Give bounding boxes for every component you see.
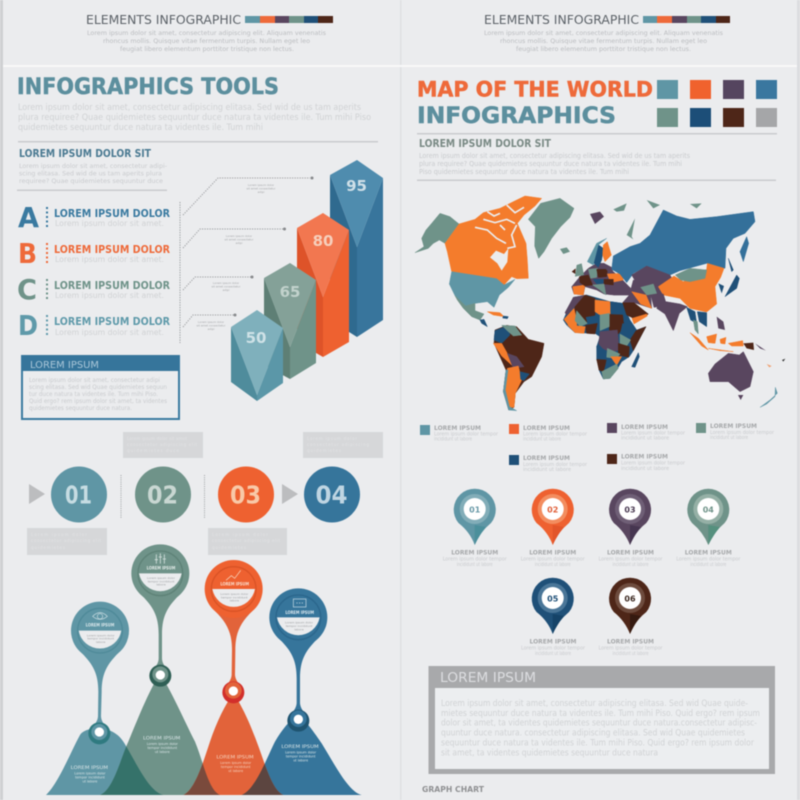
leader captions: Lorem ipsum dolor <box>198 320 225 324</box>
text: quidemietes <box>307 448 341 453</box>
legend item teal: LOREM IPSUM <box>434 424 481 432</box>
legend item navy: Lorem ipsum dolor tempor <box>523 462 588 468</box>
title: map of the world infographics: MAP OF THE WORLD <box>417 78 653 102</box>
bar 50 <box>231 310 283 401</box>
legend item navy: incididunt ut labore <box>523 467 571 473</box>
pin 06: 06 <box>624 594 636 604</box>
bar 95 <box>330 160 383 337</box>
bar 80 <box>297 213 349 357</box>
balloon: teal eye: LOREM IPSUM <box>86 622 114 628</box>
mountain labels: tempor incididunt <box>221 765 251 769</box>
legend item green: LOREM IPSUM <box>710 422 757 430</box>
item B: LOREM IPSUM DOLOR <box>54 244 170 256</box>
legend item purple: LOREM IPSUM <box>621 423 668 431</box>
pin 04: LOREM IPSUM <box>685 548 732 556</box>
mountain: orange <box>183 693 283 795</box>
overlap: green and orange <box>184 764 220 796</box>
header: right elements infographic: feugiat libero elementum porttitor tristique non lectus. <box>516 45 691 53</box>
text: Lorem ipsum dolor sit amet <box>127 436 187 441</box>
text: Lorem ipsum dolor <box>307 436 357 441</box>
balloon: teal eye: Lorem ipsum dolor <box>87 633 115 637</box>
legend item teal: Lorem ipsum dolor tempor <box>434 432 499 438</box>
step 03: 03 <box>230 480 261 510</box>
text: quidemietes <box>31 545 65 550</box>
grey text panel: quuntur duce natura. consectetur adipiscing elitasa. Sed wid Quae quidemietes <box>441 728 745 738</box>
bar 95: 95 <box>346 177 367 195</box>
overlap: orange and blue <box>242 764 283 796</box>
leader captions: sit amet consectetur <box>197 324 226 328</box>
pin 05: Lorem ipsum dolor tempor <box>521 646 586 652</box>
header: right elements infographic <box>484 13 730 53</box>
pin 02: LOREM IPSUM <box>529 548 576 556</box>
leader captions <box>197 183 276 331</box>
step 04: 04 <box>316 480 348 510</box>
item C: C <box>17 273 37 306</box>
text: consectetur adipiscing <box>307 442 369 447</box>
header: left elements infographic: feugiat libero elementum porttitor tristique non lectus. <box>120 45 294 53</box>
pin 06: LOREM IPSUM <box>607 638 654 646</box>
legend item orange <box>509 424 588 442</box>
step 01: 01 <box>65 480 92 510</box>
item A <box>18 201 170 234</box>
balloon: blue chat: tempor incididunt <box>286 624 313 628</box>
header: right elements infographic: ELEMENTS INFOGRAPHIC <box>484 13 639 27</box>
header: left elements infographic: rhoncus mollis. Quisque vitae fermentum turpis. Nullam eget leo <box>103 37 310 45</box>
step 04 <box>304 466 360 522</box>
item A: A <box>18 201 39 234</box>
balloon: blue chat: labore <box>294 627 304 631</box>
pin 03: Lorem ipsum dolor tempor <box>598 556 663 562</box>
legend item purple <box>607 423 686 442</box>
pin 01: LOREM IPSUM <box>451 548 498 556</box>
legend item brown <box>607 452 686 472</box>
africa <box>563 295 646 379</box>
asia <box>612 210 755 334</box>
subheading: map text: LOREM IPSUM DOLOR SIT <box>419 138 552 150</box>
text: consectetur adipiscing elit <box>31 538 101 543</box>
legend item orange: incididunt ut labore <box>523 436 561 442</box>
pin 01: Lorem ipsum dolor tempor <box>443 556 508 562</box>
mountain labels: ut labore <box>293 758 308 762</box>
grey text panel: sit amet, ta videntes quidemietes sequuntur duce natura <box>441 748 658 758</box>
leader captions: Lorem ipsum dolor <box>213 281 240 285</box>
arrow 1 <box>29 484 45 504</box>
mountain labels: Lorem ipsum dolor <box>74 771 106 775</box>
pin 01 <box>443 489 508 568</box>
legend item teal <box>420 424 499 442</box>
text: Lorem ipsum dolor <box>212 532 268 537</box>
header: left elements infographic: ELEMENTS INFOGRAPHIC <box>86 13 241 27</box>
overlap: teal and green <box>100 746 162 796</box>
intro text block: Lorem ipsum dolor sit amet, consectetur adipiscing elitasa. Sed wid de us tam aperits <box>18 103 361 113</box>
title: map of the world infographics: INFOGRAPHICS <box>417 103 616 129</box>
pin 02 <box>521 489 586 568</box>
bar 65 <box>264 263 316 379</box>
step 03 <box>218 466 274 522</box>
subheading: map text: Piso quidemietes sequuntur duce natura ta videntes ile. Tum mihi <box>419 168 629 176</box>
balloon: orange chart: tempor incididunt <box>221 595 248 599</box>
subheading block: scing elitasa. Sed wid de us tam aperits plura <box>19 170 162 178</box>
balloon: orange chart: Lorem ipsum dolor <box>220 592 249 596</box>
item B: B <box>18 237 37 270</box>
mountain labels: Lorem ipsum dolor <box>285 750 317 754</box>
grey caption boxes <box>27 432 383 555</box>
mountain labels: Lorem ipsum dolor <box>220 761 252 765</box>
leader lines <box>180 176 314 343</box>
item D: D <box>18 309 38 342</box>
callout box: lorem ipsum: tur duce natura ta videntes ile. Tum mihi Piso. <box>29 390 158 398</box>
mountain: green <box>100 673 220 795</box>
text: consectetur adipiscing elit <box>127 442 197 447</box>
legend item brown: Lorem ipsum dolor tempor <box>621 460 686 466</box>
item D: Lorem ipsum dolor sit amet. <box>55 328 164 337</box>
mountain labels: LOREM IPSUM <box>281 744 319 750</box>
mountain labels: ut labore <box>155 750 170 754</box>
islands north <box>560 200 702 254</box>
pin 05: incididunt ut labore <box>535 651 571 657</box>
leader captions: adipi <box>258 190 265 194</box>
legend item orange: LOREM IPSUM <box>523 424 570 432</box>
mountain: teal <box>46 728 163 795</box>
subheading block: requiree? Quae quidemietes sequuntur duce <box>19 177 163 185</box>
legend item brown: LOREM IPSUM <box>621 452 668 460</box>
item A: Lorem ipsum dolor sit amet. <box>55 219 164 228</box>
pin 06: incididunt ut labore <box>612 651 648 657</box>
balloon: orange chart: LOREM IPSUM <box>220 582 249 588</box>
pin 05: 05 <box>547 594 559 604</box>
header: left elements infographic: Lorem ipsum dolor sit amet, consectetur adipiscing elit. Aliquam venenatis <box>87 29 327 37</box>
balloon: orange chart <box>205 560 263 703</box>
item D: LOREM IPSUM DOLOR <box>54 316 170 328</box>
title: map of the world infographics <box>417 78 653 129</box>
item C: LOREM IPSUM DOLOR <box>54 280 170 292</box>
item B: Lorem ipsum dolor sit amet. <box>55 255 164 264</box>
pin 06: Lorem ipsum dolor tempor <box>598 646 663 652</box>
bar 50: 50 <box>246 329 266 347</box>
item C <box>17 273 170 306</box>
intro text block <box>18 103 371 133</box>
pin 03: 03 <box>624 506 636 514</box>
pin 05 <box>521 578 586 657</box>
pin 06 <box>598 578 663 657</box>
item B <box>18 237 170 270</box>
subheading block: Lorem ipsum dolor sit amet, consectetur adipi- <box>19 162 168 170</box>
mountain labels: Lorem ipsum dolor <box>147 742 179 746</box>
legend item purple: incididunt ut labore <box>621 436 669 442</box>
subheading: map text <box>419 138 690 176</box>
grey text panel: sequuntur duce natura ta videntes ile. Tum mihi Piso. Quid ergo? rem ipsum dolor <box>441 738 754 748</box>
legend item green: incididunt ut labore <box>710 435 748 441</box>
pin 04: incididunt ut labore <box>690 562 726 568</box>
pin 01: 01 <box>469 506 481 514</box>
mountain labels: LOREM IPSUM <box>216 755 254 761</box>
step 02: 02 <box>147 480 178 510</box>
subheading block: LOREM IPSUM DOLOR SIT <box>19 148 152 160</box>
list: A B C D <box>17 201 170 342</box>
balloon: blue chat: LOREM IPSUM <box>285 610 314 616</box>
legend item teal: incididunt ut labore <box>434 436 472 442</box>
balloon: teal eye <box>71 602 129 744</box>
legend item green: Lorem ipsum dolor tempor <box>710 430 775 436</box>
balloon: green sliders: labore <box>156 583 166 587</box>
subheading: map text: plura requiree? Quae quidemietes sequuntur duce natura ta videntes ile. Tum mihi <box>419 160 682 168</box>
callout box: lorem ipsum: quidemietes sequuntur duce natura. <box>29 404 132 412</box>
mountain: blue <box>242 713 362 795</box>
pin 03: LOREM IPSUM <box>607 548 654 556</box>
mountain labels: tempor incididunt <box>148 746 178 750</box>
balloon: blue chat: Lorem ipsum dolor <box>285 621 314 625</box>
indonesia and oceania <box>690 333 785 407</box>
south america <box>493 325 544 411</box>
leader captions: sit amet consectetur <box>225 238 254 242</box>
mountain labels: LOREM IPSUM <box>143 736 180 742</box>
balloon: teal eye: labore <box>96 640 106 644</box>
callout box: lorem ipsum: LOREM IPSUM <box>30 360 99 371</box>
balloon: green sliders: Lorem ipsum dolor <box>147 576 176 580</box>
balloon: green sliders: tempor incididunt <box>148 579 175 583</box>
pin 05: LOREM IPSUM <box>530 638 576 646</box>
step 02 <box>135 466 191 522</box>
icon: sliders <box>155 553 166 564</box>
balloon: green sliders: LOREM IPSUM <box>147 565 175 571</box>
north america <box>415 196 542 327</box>
world map <box>415 196 785 411</box>
icon: eye <box>93 613 107 619</box>
pin 04 <box>676 489 741 568</box>
pin 02: 02 <box>547 506 558 514</box>
mountain labels: tempor incididunt <box>286 754 316 758</box>
balloon mountains chart <box>46 544 362 795</box>
heading: graph chart: GRAPH CHART <box>422 785 485 794</box>
legend item purple: Lorem ipsum dolor tempor <box>621 430 686 436</box>
text: Lorem ipsum dolor <box>31 532 87 537</box>
item C: Lorem ipsum dolor sit amet. <box>55 291 164 300</box>
header: left elements infographic <box>86 13 333 53</box>
subheading: map text: Lorem ipsum dolor sit amet, consectetur adipiscing elitasa. Sed wid de us tam aperits <box>419 152 690 160</box>
mountain labels: ut labore <box>83 779 97 783</box>
balloon: green sliders <box>131 544 189 687</box>
callout box: lorem ipsum: Lorem ipsum dolor sit amet, consectetur adipi <box>29 376 160 384</box>
leader captions: sit amet consectetur <box>212 284 241 288</box>
mountain labels: LOREM IPSUM <box>71 765 108 771</box>
item D <box>18 309 170 342</box>
legend item green <box>696 422 775 441</box>
mountain labels: ut labore <box>228 769 243 773</box>
mountain labels: tempor incididunt <box>75 775 106 779</box>
balloon: teal eye: tempor incididunt <box>87 637 115 641</box>
text: quidemietes duce <box>127 448 180 453</box>
step 01 <box>51 466 107 522</box>
header: right elements infographic: Lorem ipsum dolor sit amet, consectetur adipiscing elit. Aliquam venenatis <box>484 29 724 37</box>
icon land: greenland <box>528 198 574 258</box>
mountain labels <box>71 736 319 783</box>
grey text panel: Lorem ipsum dolor sit amet, consectetur adipiscing elitasa. Sed wid Quae quide- <box>441 699 748 709</box>
leader captions: adipi <box>208 327 215 331</box>
colour swatches <box>657 80 777 127</box>
item A: LOREM IPSUM DOLOR <box>54 208 170 220</box>
legend item navy: LOREM IPSUM <box>523 454 570 462</box>
icon: chat box <box>293 599 306 607</box>
balloon: blue chat <box>269 588 327 732</box>
bar 80: 80 <box>313 232 333 250</box>
leader captions: adipi <box>236 241 243 245</box>
isometric bar chart <box>231 160 383 401</box>
pin 03: incididunt ut labore <box>612 562 648 568</box>
leader captions: adipi <box>223 288 230 292</box>
leader captions: Lorem ipsum dolor <box>248 183 275 187</box>
arrow 2 <box>282 484 298 504</box>
title: infographics tools: INFOGRAPHICS TOOLS <box>17 74 279 100</box>
subheading block <box>19 148 168 185</box>
grey text panel <box>428 666 775 774</box>
legend item navy <box>509 454 588 473</box>
legend item brown: incididunt ut labore <box>621 466 669 472</box>
pin 04: 04 <box>703 506 714 514</box>
intro text block: plura requiree? Quae quidemietes sequuntur duce natura ta videntes ile. Tum mihi Piso <box>18 113 371 123</box>
text: consectetur adipiscing elit <box>212 538 280 543</box>
pin 02: incididunt ut labore <box>535 562 571 568</box>
legend item orange: Lorem ipsum dolor tempor <box>523 432 588 438</box>
grey text panel: LOREM IPSUM <box>440 671 536 686</box>
legend <box>420 422 775 473</box>
text: quidemietes <box>212 545 246 550</box>
pin 02: Lorem ipsum dolor tempor <box>521 556 586 562</box>
leader captions: Lorem ipsum dolor <box>226 234 253 238</box>
pin 01: incididunt ut labore <box>457 562 493 568</box>
europe <box>572 238 631 295</box>
intro text block: quidemietes sequuntur duce natura ta videntes ile. Tum mihi <box>18 123 263 133</box>
balloon: orange chart: labore <box>230 599 239 603</box>
leader captions: sit amet consectetur <box>247 186 276 190</box>
icon: line chart <box>226 570 241 580</box>
callout box: lorem ipsum: scing elitasa. Sed wid Quae quidemietes sequun <box>29 383 167 391</box>
header: right elements infographic: rhoncus mollis. Quisque vitae fermentum turpis. Nullam eget leo <box>500 37 707 45</box>
pin 04: Lorem ipsum dolor tempor <box>676 556 741 562</box>
callout box: lorem ipsum <box>22 355 179 419</box>
callout box: lorem ipsum: Quid ergo? rem ipsum dolor sit amet, ta videntes <box>29 397 168 405</box>
pin 03 <box>598 489 663 568</box>
bar 65: 65 <box>280 283 300 301</box>
